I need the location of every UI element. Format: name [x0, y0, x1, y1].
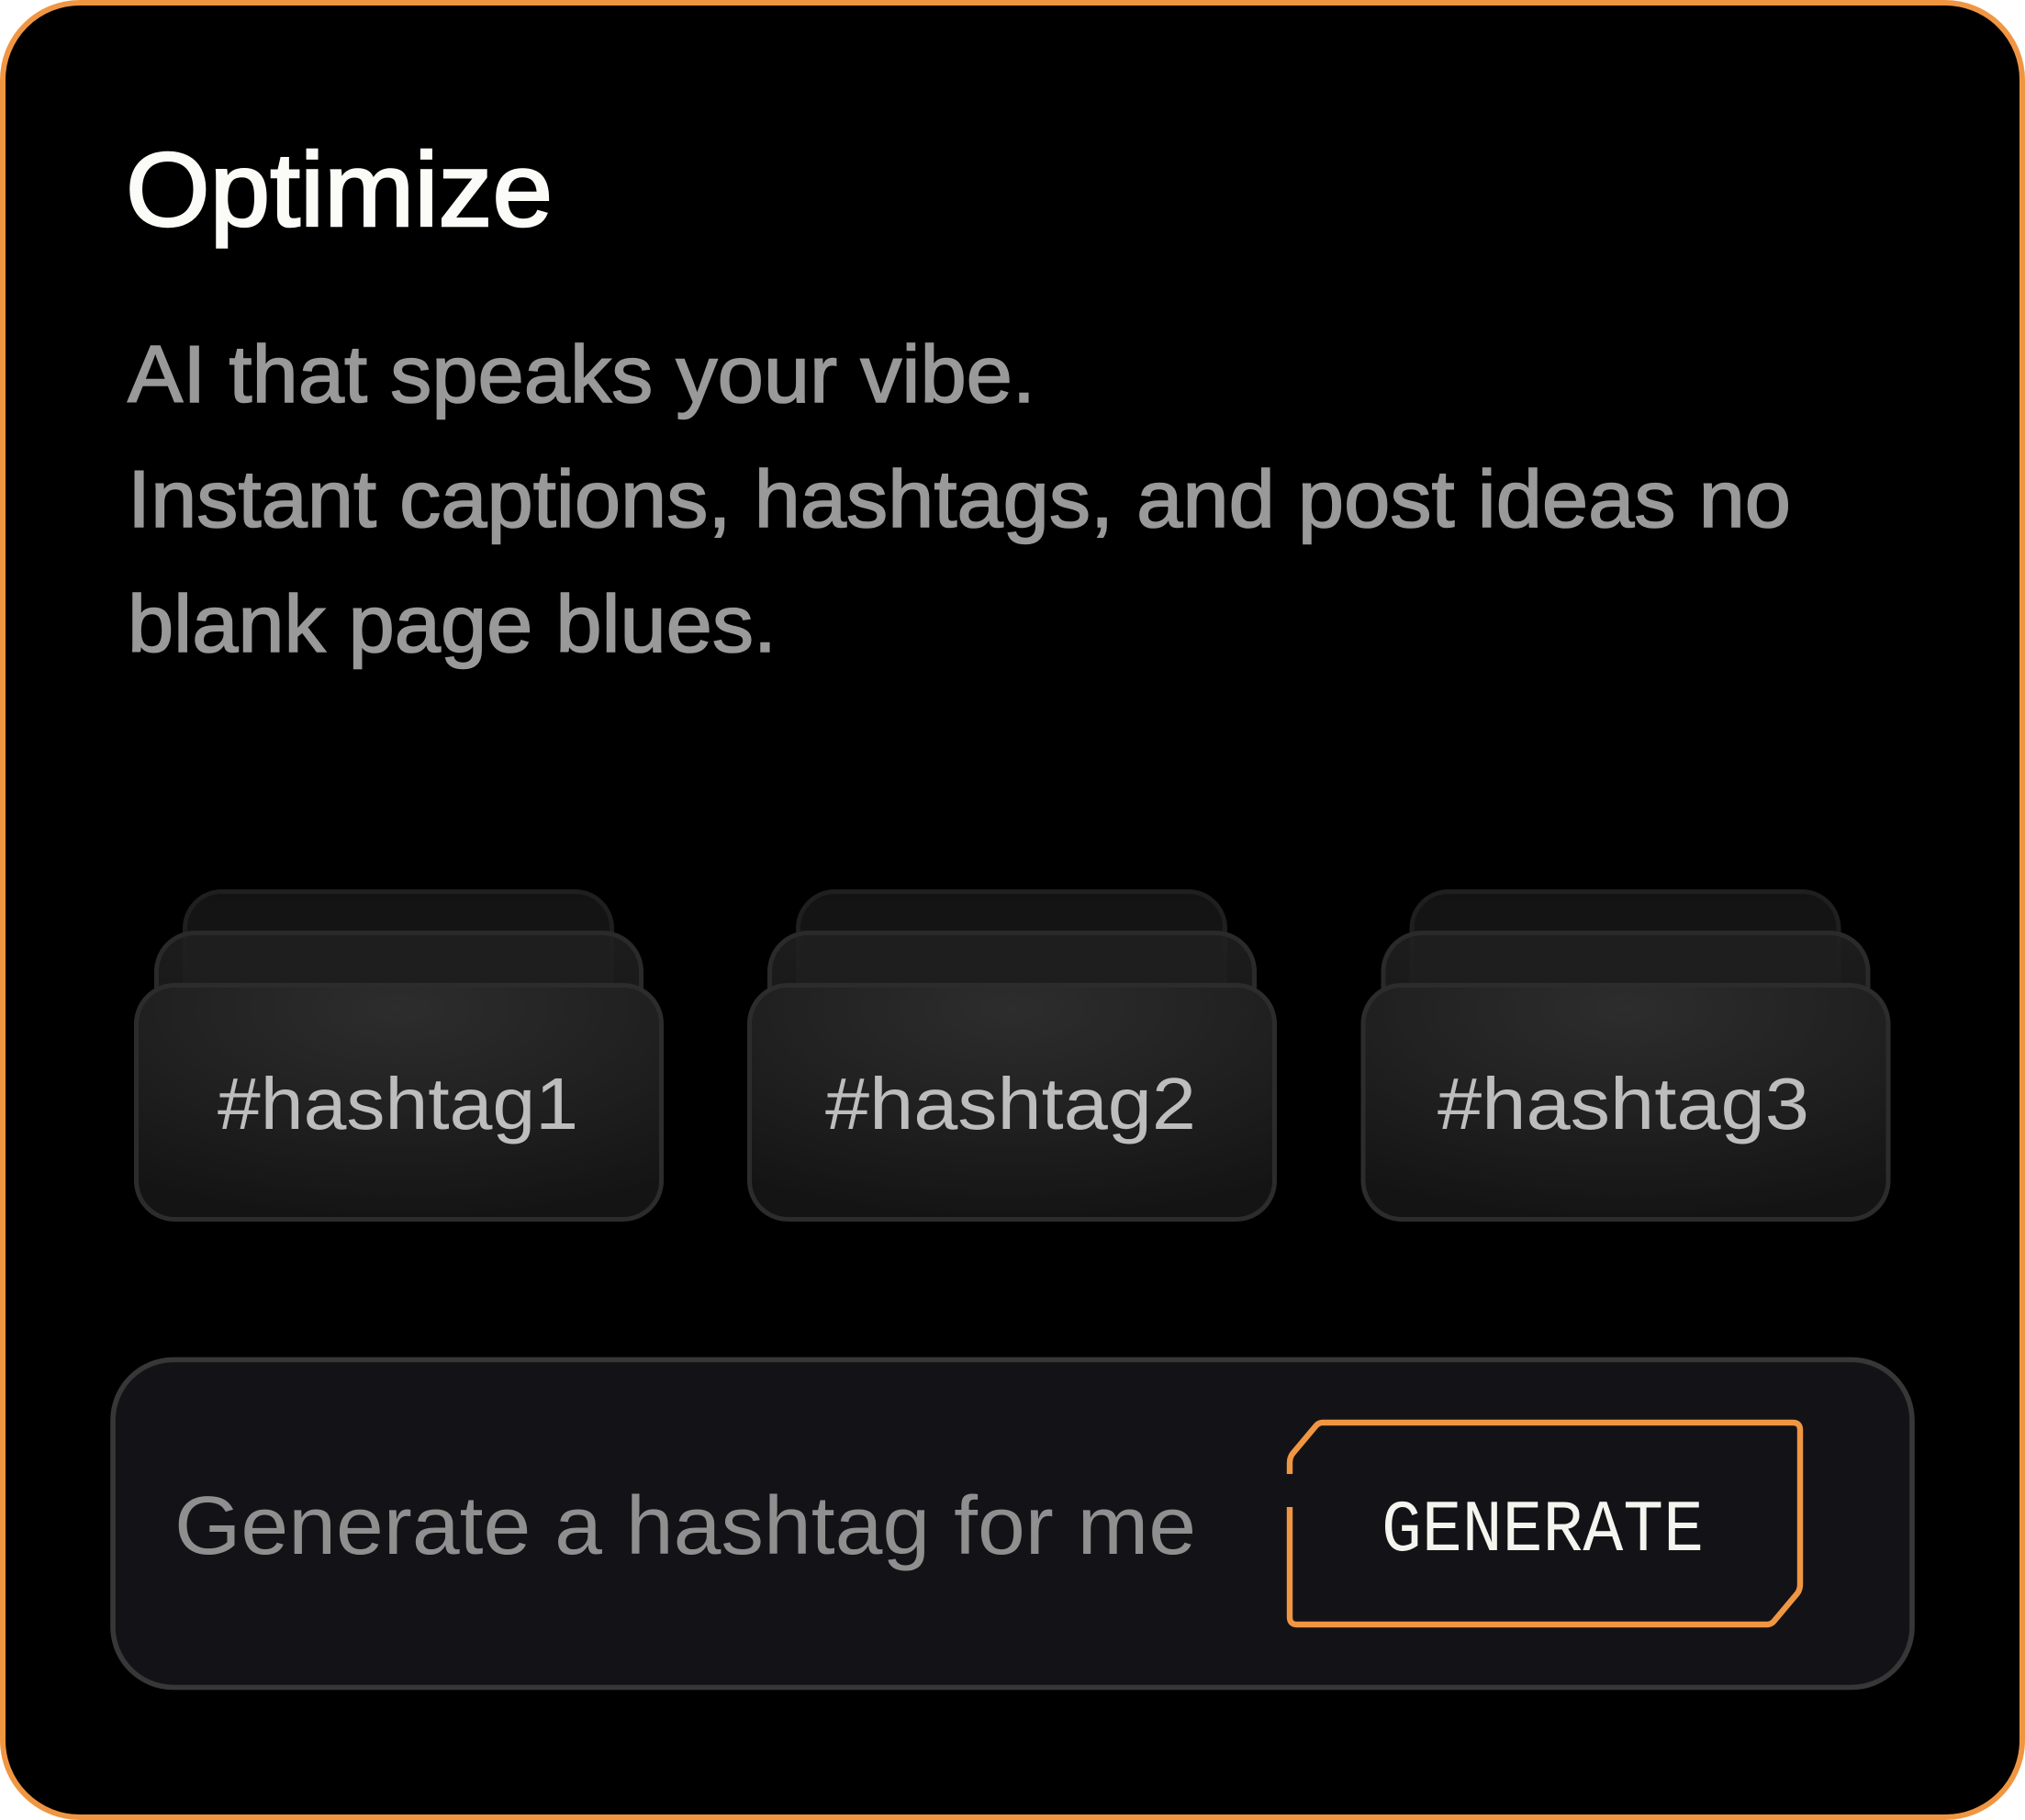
label: hashtag3: #hashtag3 — [1438, 1063, 1809, 1144]
hashtag stack 2 — [749, 892, 1274, 1219]
text block: description: blank page blues. — [128, 578, 777, 669]
hashtag stack 3 — [1363, 892, 1888, 1219]
input placeholder text: Generate a hashtag for me — [174, 1480, 1196, 1572]
text block: description — [128, 329, 1791, 669]
text block: description: Instant captions, hashtags, and post ideas no — [128, 453, 1791, 544]
title: Optimize — [126, 132, 553, 249]
button label: GENERATE — [1382, 1490, 1704, 1573]
label: hashtag2: #hashtag2 — [825, 1063, 1196, 1144]
hashtag stack 1 — [136, 892, 661, 1219]
label: hashtag1: #hashtag1 — [218, 1063, 578, 1144]
input bar — [113, 1360, 1912, 1687]
text block: description: AI that speaks your vibe. — [128, 329, 1035, 419]
generate button — [1290, 1423, 1800, 1625]
